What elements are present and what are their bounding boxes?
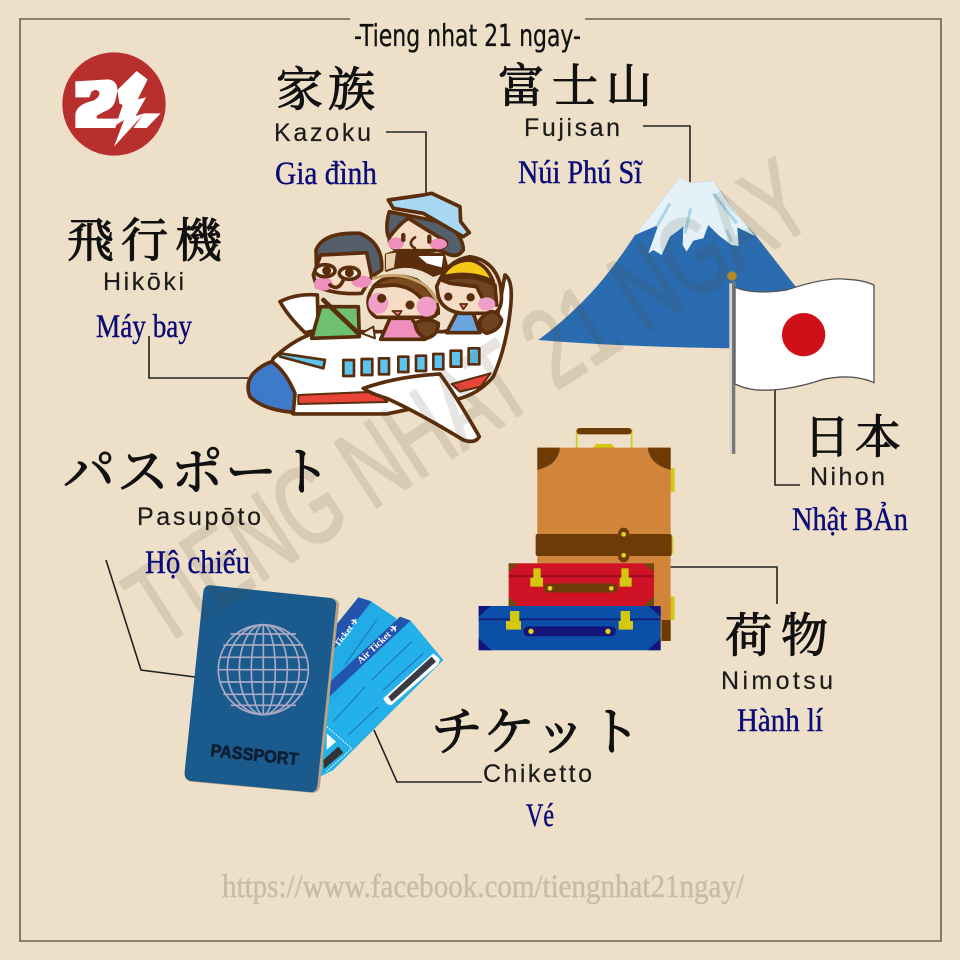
label: luggage: Hành lí	[737, 703, 823, 739]
label: Japan	[792, 412, 908, 538]
illustration: passport	[185, 585, 339, 793]
label: luggage: Nimotsu	[721, 667, 833, 695]
label: ticket	[431, 705, 641, 834]
label: Japan: Nhật BẢn	[792, 501, 908, 538]
label: ticket: Vé	[526, 798, 554, 834]
label: Mount Fuji: Fujisan	[524, 114, 620, 142]
illustration: air tickets	[303, 597, 443, 777]
label: ticket: チケット	[431, 705, 641, 762]
label: passport: Pasupōto	[137, 503, 261, 531]
illustration: Japanese flag	[727, 271, 874, 454]
illustration: air tickets: Air Ticket ✈	[355, 622, 402, 666]
connector lines	[106, 126, 800, 782]
label: family: Kazoku	[274, 119, 371, 147]
label: family: Gia đình	[275, 156, 377, 192]
logo: 21	[62, 52, 166, 156]
label: ticket: Chiketto	[483, 760, 592, 788]
label: passport: パスポート	[63, 445, 331, 502]
label: airplane	[67, 216, 229, 345]
label: passport: Hộ chiếu	[145, 545, 250, 581]
label: Japan: Nihon	[810, 463, 885, 491]
label: luggage: 荷物	[725, 611, 837, 663]
label: Japan: 日本	[804, 412, 906, 463]
illustration: air tickets: Ticket ✈	[332, 615, 361, 649]
label: luggage	[721, 611, 837, 739]
header text: -Tieng nhat 21 ngay-	[354, 19, 581, 54]
label: Mount Fuji: 富士山	[498, 61, 660, 112]
label: Mount Fuji: Núi Phú Sĩ	[518, 155, 643, 191]
illustration: suitcases	[479, 428, 675, 650]
label: passport	[63, 445, 331, 581]
label: family	[274, 65, 380, 192]
label: Mount Fuji	[498, 61, 660, 191]
footer url: https://www.facebook.com/tiengnhat21ngay/	[222, 869, 745, 905]
label: airplane: Máy bay	[96, 309, 192, 345]
illustration: family on plane	[248, 193, 511, 441]
label: airplane: 飛行機	[67, 216, 229, 268]
label: family: 家族	[276, 65, 380, 117]
illustration: passport: PASSPORT	[210, 740, 300, 769]
illustration: Mount Fuji	[538, 177, 798, 348]
label: airplane: Hikōki	[103, 268, 184, 296]
